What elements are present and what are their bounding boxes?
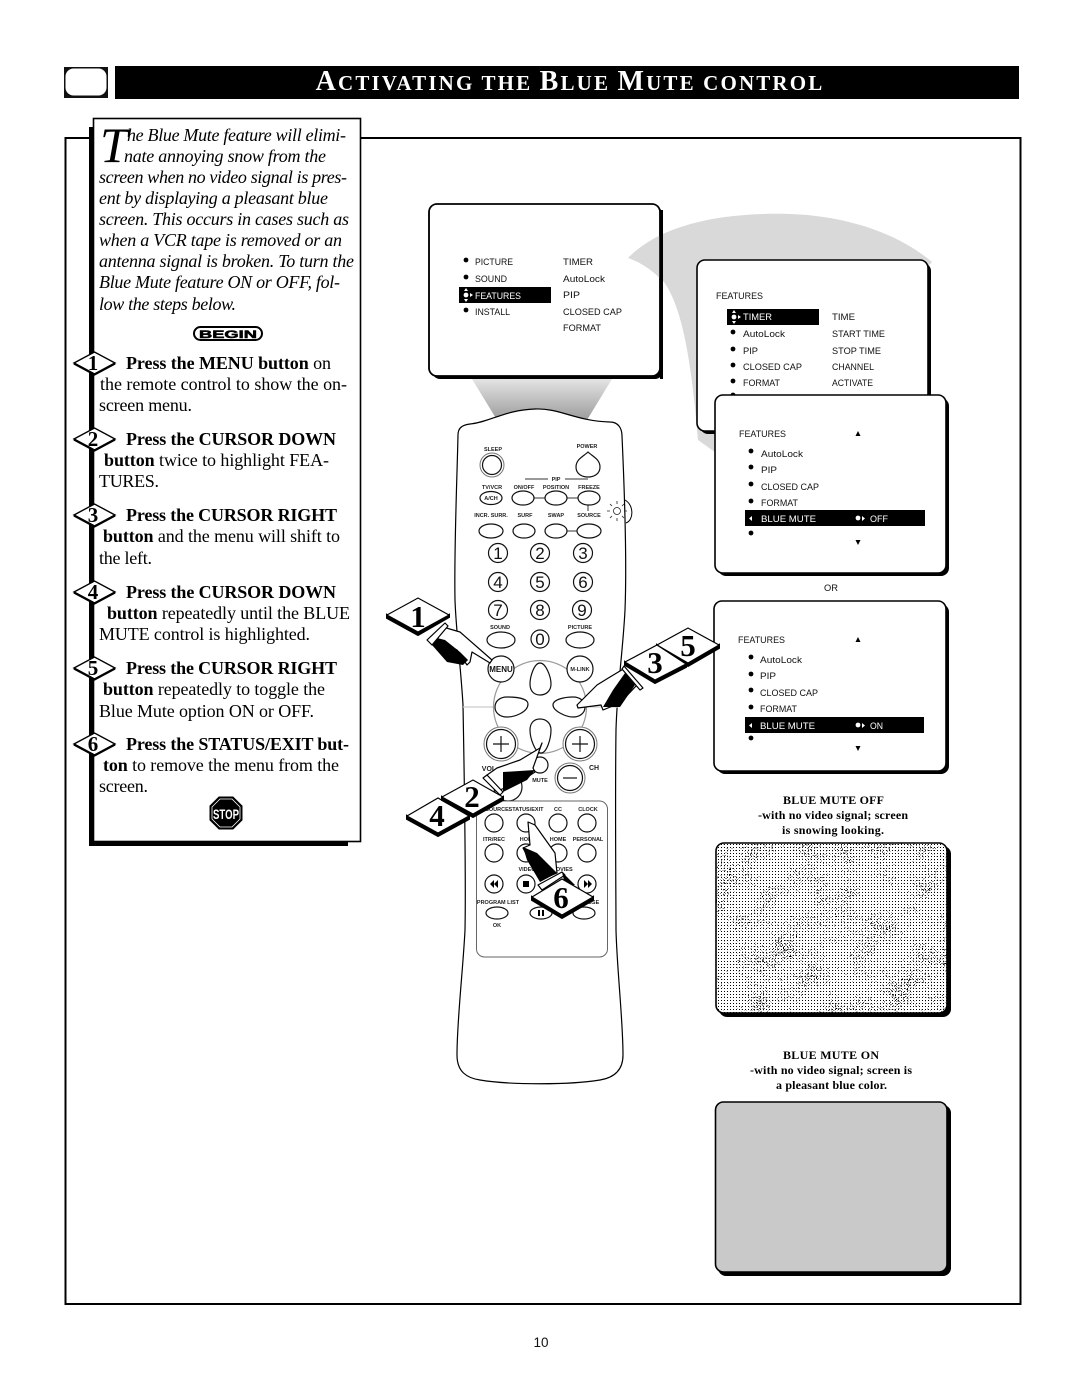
begin badge: BEGIN <box>199 329 257 341</box>
menu screen 3: blue mute off: BLUE MUTE <box>761 514 816 525</box>
lower button panel: PERSONAL <box>573 837 604 843</box>
gray swoosh from menu to menu <box>628 214 932 470</box>
label: or: OR <box>824 583 838 594</box>
icon: stop sign: STOP <box>213 806 239 822</box>
step 1 <box>74 351 347 415</box>
number keys: 1 <box>493 544 503 563</box>
hand pointer 3 and 5: cursor right <box>577 628 719 710</box>
step 6: ton to remove the menu from the <box>103 755 339 775</box>
caption: blue mute off: -with no video signal; screen <box>758 808 908 822</box>
panel: instructions <box>74 117 360 846</box>
step 3 <box>74 503 340 568</box>
caption: blue mute on: a pleasant blue color. <box>776 1078 887 1092</box>
step 3: button and the menu will shift to <box>103 526 340 546</box>
top buttons: A/CH <box>484 496 498 502</box>
step 4: button repeatedly until the BLUE <box>107 603 350 623</box>
menu screen 2: AutoLock <box>743 329 785 340</box>
menu screen 1: CLOSED CAP <box>563 307 622 318</box>
lower button panel: ITR/REC <box>483 837 505 843</box>
number keys: 9 <box>577 601 587 620</box>
menu screen 3: blue mute off <box>715 395 949 576</box>
menu screen 4: blue mute on: FEATURES <box>738 635 785 646</box>
number keys: 5 <box>535 573 545 592</box>
lower button panel: CC <box>554 807 562 813</box>
begin badge <box>194 327 262 341</box>
hand pointer 2 and 4: cursor down <box>407 743 542 836</box>
number keys: 3 <box>578 544 588 563</box>
intro text: when a VCR tape is removed or an <box>99 230 342 250</box>
top buttons: SWAP <box>548 513 564 519</box>
step 3: 3 <box>88 503 98 527</box>
lower button panel: PROGRAM LIST <box>477 900 520 906</box>
menu screen 3: blue mute off: FEATURES <box>739 429 786 440</box>
menu screen 2: CLOSED CAP <box>743 362 802 373</box>
menu screen 4: blue mute on: ON <box>870 721 883 732</box>
caption: blue mute on: -with no video signal; screen is <box>750 1063 912 1077</box>
number keys: SOUND <box>490 625 510 631</box>
step 6 <box>74 732 349 796</box>
menu screen 2 <box>697 260 931 434</box>
menu screen 2: PIP <box>743 346 758 357</box>
hand pointer 6: status exit <box>523 822 593 918</box>
lower button panel <box>476 801 608 957</box>
step 4 <box>74 580 350 644</box>
menu screen 3: blue mute off: CLOSED CAP <box>761 482 819 493</box>
beam from remote to screen <box>472 379 612 420</box>
step 2: Press the CURSOR DOWN <box>126 429 336 449</box>
menu screen 1: FORMAT <box>563 323 601 334</box>
lower button panel: VIDEO <box>518 867 536 873</box>
number keys: 6 <box>578 573 588 592</box>
menu screen 3: blue mute off: PIP <box>761 465 777 476</box>
remote control <box>455 409 632 1084</box>
menu screen 1: SOUND <box>475 274 507 285</box>
top buttons <box>474 444 601 538</box>
menu screen 2: STOP TIME <box>832 346 881 357</box>
menu screen 1: TIMER <box>563 257 593 268</box>
caption: blue mute on: BLUE MUTE ON <box>783 1048 879 1062</box>
top buttons: SLEEP <box>484 447 502 453</box>
top buttons: PIP <box>552 477 561 483</box>
step 4: Press the CURSOR DOWN <box>126 582 336 602</box>
intro text: ent by displaying a pleasant blue <box>99 188 328 208</box>
intro text: Blue Mute feature ON or OFF, fol- <box>99 272 340 292</box>
remote body <box>455 409 626 1084</box>
step 5: button repeatedly to toggle the <box>103 679 325 699</box>
step 5 <box>74 656 337 721</box>
caption: blue mute off: BLUE MUTE OFF <box>783 793 884 807</box>
menu screen 2: CHANNEL <box>832 362 874 373</box>
menu screen 1: FEATURES <box>475 291 521 302</box>
hand pointer 1: menu button: 1 <box>410 599 426 634</box>
intro text: T <box>100 117 131 173</box>
icon: sensor light <box>607 501 627 521</box>
menu screen 2: TIMER <box>743 312 772 323</box>
volume and channel buttons: MUTE <box>532 778 548 784</box>
cursor pad: MENU <box>489 665 513 674</box>
main content frame <box>66 138 1020 1304</box>
volume and channel buttons: CH <box>589 765 599 772</box>
number keys: PICTURE <box>568 625 592 631</box>
menu screen 3: blue mute off: OFF <box>870 514 888 525</box>
menu screen 4: blue mute on: PIP <box>760 671 776 682</box>
top buttons: ON/OFF <box>514 485 535 491</box>
side sensor window <box>625 500 632 523</box>
menu screen 2: TIME <box>832 312 855 323</box>
lower button panel: MOVIES <box>551 867 573 873</box>
menu screen 4: blue mute on: BLUE MUTE <box>760 721 815 732</box>
lower button panel: STATUS/EXIT <box>509 807 544 813</box>
step 1: screen menu. <box>99 395 192 415</box>
step 5: Blue Mute option ON or OFF. <box>99 701 314 721</box>
number keys: 4 <box>493 573 503 592</box>
step 5: 5 <box>88 656 98 680</box>
top buttons: FREEZE <box>578 485 600 491</box>
blue screen <box>716 1102 951 1276</box>
menu screen 1: PICTURE <box>475 257 513 268</box>
step 6: Press the STATUS/EXIT but- <box>126 734 349 754</box>
lower button panel: CLOCK <box>578 807 598 813</box>
cursor pad: M-LINK <box>570 667 590 673</box>
menu screen 2: ACTIVATE <box>832 378 873 389</box>
step 6: 6 <box>88 732 98 756</box>
step 2: TURES. <box>99 471 159 491</box>
title bar <box>115 66 1019 99</box>
page number: 10 <box>533 1335 549 1350</box>
menu screen 1: PIP <box>563 290 580 301</box>
menu screen 1 <box>429 204 663 379</box>
menu screen 1: AutoLock <box>563 274 605 285</box>
step 1: Press the MENU button on <box>126 353 331 373</box>
lower button panel: HOME <box>550 837 567 843</box>
hand pointer 2 and 4: cursor down: 4 <box>429 798 445 833</box>
lower button panel: HOME <box>520 837 537 843</box>
hand pointer 2 and 4: cursor down: 2 <box>464 779 480 814</box>
step 1: 1 <box>88 351 98 375</box>
step 1: the remote control to show the on- <box>100 374 347 394</box>
lower button panel: OK <box>493 923 501 929</box>
caption: blue mute on <box>750 1048 912 1092</box>
menu screen 2: FORMAT <box>743 378 780 389</box>
intro text: screen when no video signal is pres- <box>99 167 347 187</box>
hand pointer 6: status exit: 6 <box>553 880 569 915</box>
menu screen 2: FEATURES <box>716 291 763 302</box>
caption: blue mute off <box>758 793 908 837</box>
top buttons: SURF <box>518 513 533 519</box>
number keys <box>487 544 594 649</box>
top buttons: TV/VCR <box>482 485 502 491</box>
menu screen 1: INSTALL <box>475 307 510 318</box>
step 2: button twice to highlight FEA- <box>104 450 329 470</box>
hand pointer 3 and 5: cursor right: 5 <box>680 628 696 663</box>
top buttons: INCR. SURR. <box>474 513 508 519</box>
number keys: 0 <box>535 630 545 649</box>
intro text: low the steps below. <box>99 294 236 314</box>
intro text: nate annoying snow from the <box>124 146 326 166</box>
step 5: Press the CURSOR RIGHT <box>126 658 337 678</box>
intro text <box>99 117 354 314</box>
number keys: 2 <box>535 544 545 563</box>
snowy screen <box>716 843 951 1017</box>
step 3: the left. <box>99 548 152 568</box>
menu screen 4: blue mute on: FORMAT <box>760 704 797 715</box>
top buttons: POSITION <box>543 485 569 491</box>
lower button panel: PAUSE <box>581 900 600 906</box>
menu screen 3: blue mute off: FORMAT <box>761 498 798 509</box>
hand pointer 1: menu button <box>387 598 492 665</box>
cursor pad <box>463 656 618 754</box>
caption: blue mute off: is snowing looking. <box>782 823 884 837</box>
volume and channel buttons <box>482 727 599 801</box>
menu screen 4: blue mute on: AutoLock <box>760 655 802 666</box>
intro text: screen. This occurs in cases such as <box>99 209 349 229</box>
step 2 <box>74 427 336 491</box>
intro text: he Blue Mute feature will elimi- <box>127 125 346 145</box>
intro text: antenna signal is broken. To turn the <box>99 251 354 271</box>
menu screen 4: blue mute on: CLOSED CAP <box>760 688 818 699</box>
step 6: screen. <box>99 776 148 796</box>
step 4: 4 <box>88 580 99 604</box>
title bar: ACTIVATING THE BLUE MUTE CONTROL <box>316 66 824 97</box>
volume and channel buttons: VOL <box>482 766 497 773</box>
menu screen 3: blue mute off: AutoLock <box>761 449 803 460</box>
number keys: 7 <box>493 601 503 620</box>
step 3: Press the CURSOR RIGHT <box>126 505 337 525</box>
lower button panel: SOURCE <box>485 807 509 813</box>
step 4: MUTE control is highlighted. <box>99 624 310 644</box>
top buttons: POWER <box>577 444 597 450</box>
menu screen 2: START TIME <box>832 329 885 340</box>
step 2: 2 <box>88 427 98 451</box>
icon: television <box>64 67 108 98</box>
number keys: 8 <box>535 601 545 620</box>
top buttons: SOURCE <box>577 513 601 519</box>
hand pointer 3 and 5: cursor right: 3 <box>647 645 663 680</box>
icon: stop sign <box>210 797 242 829</box>
menu screen 4: blue mute on <box>714 601 949 774</box>
